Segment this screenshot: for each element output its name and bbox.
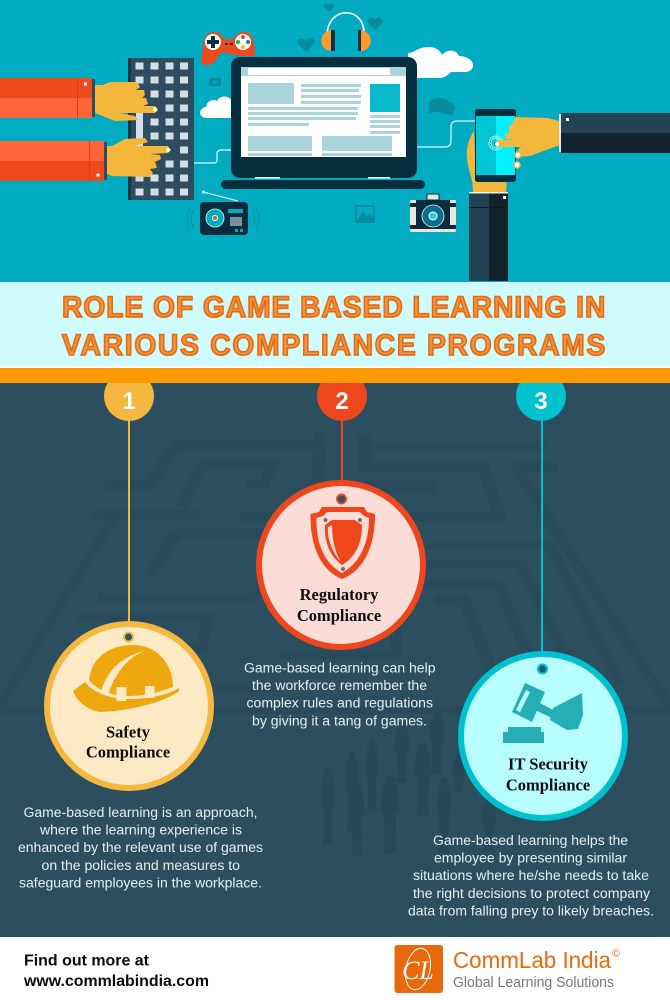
laptop screen — [241, 67, 406, 157]
item 1: safety compliance — [18, 383, 263, 890]
icon: video — [209, 78, 221, 86]
description: Game-based learning can help — [244, 660, 436, 676]
label: Compliance — [86, 742, 170, 762]
right cloud — [408, 47, 473, 78]
description: data from falling prey to likely breaches. — [408, 904, 654, 918]
description — [244, 660, 436, 728]
lower left arm and hand — [0, 138, 171, 181]
item 3: IT security compliance — [408, 383, 654, 918]
label: Compliance — [506, 776, 590, 794]
connector line — [541, 420, 543, 665]
icon: speech bubbles — [428, 98, 455, 115]
call to action text: www.commlabindia.com — [23, 973, 209, 990]
title — [62, 291, 605, 362]
connector line — [128, 420, 130, 625]
main dark panel — [0, 383, 670, 937]
icon: shield — [310, 507, 375, 579]
keyboard — [128, 58, 194, 200]
description: safeguard employees in the workplace. — [19, 876, 262, 890]
logo mark: CL — [402, 956, 434, 985]
item 2: regulatory compliance — [244, 383, 436, 728]
upper left arm and hand — [0, 78, 158, 121]
title: VARIOUS COMPLIANCE PROGRAMS — [62, 329, 605, 362]
smartphone — [475, 109, 516, 182]
label — [297, 585, 381, 625]
logo mark — [394, 945, 443, 993]
label: IT Security — [508, 754, 589, 774]
badge circle — [259, 483, 423, 647]
description: the workforce remember the — [252, 678, 427, 693]
number badge 1: 1 — [122, 388, 136, 415]
description: by giving it a tang of games. — [252, 714, 427, 728]
connector line — [341, 420, 343, 495]
label: Regulatory — [300, 585, 379, 604]
hero illustration panel — [0, 0, 670, 282]
call to action text: Find out more at — [24, 952, 150, 970]
CommLab India logo — [394, 945, 620, 993]
footer — [0, 937, 670, 1000]
label — [506, 754, 590, 794]
number badge 1 — [104, 383, 154, 421]
badge circle — [47, 624, 211, 788]
cables — [194, 121, 476, 163]
description — [18, 805, 263, 890]
number badge 2 — [317, 383, 367, 421]
icon: headphones — [321, 13, 371, 51]
icon: radio — [187, 190, 259, 235]
label: Safety — [106, 722, 151, 742]
description: Game-based learning helps the — [433, 833, 628, 848]
title band — [0, 282, 670, 368]
description: complex rules and regulations — [246, 696, 433, 710]
number badge 3 — [516, 383, 566, 421]
title: ROLE OF GAME BASED LEARNING IN — [62, 291, 605, 324]
badge circle — [461, 654, 625, 818]
description — [408, 833, 654, 918]
icon: picture — [356, 206, 374, 222]
call to action text — [23, 952, 209, 990]
description: the right decisions to protect company — [413, 886, 650, 901]
logo wordmark: CommLab India — [453, 947, 611, 973]
logo wordmark — [453, 947, 620, 991]
label: Compliance — [297, 606, 381, 625]
background maze — [0, 433, 670, 710]
icon: hearts — [297, 4, 382, 52]
description: situations where he/she needs to take — [413, 868, 649, 883]
logo wordmark: © — [612, 948, 620, 960]
logo wordmark: Global Learning Solutions — [453, 974, 614, 991]
right arm and pointing hand — [495, 113, 670, 168]
description: Game-based learning is an approach, — [24, 805, 258, 820]
icon: hard hat — [73, 645, 179, 712]
left cloud — [200, 97, 232, 118]
background crowd silhouettes — [321, 712, 497, 856]
orange divider — [0, 368, 670, 383]
number badge 3: 3 — [534, 388, 548, 415]
lower right arm and holding hand — [467, 131, 508, 281]
description: employee by presenting similar — [434, 850, 628, 866]
description: on the policies and measures to — [42, 858, 240, 873]
icon: camera — [410, 194, 456, 232]
icon: game controller — [201, 32, 255, 65]
icon: gavel — [503, 683, 583, 743]
description: where the learning experience is — [39, 822, 242, 838]
label — [86, 722, 170, 762]
laptop — [221, 57, 425, 189]
number badge 2: 2 — [335, 388, 349, 415]
description: enhanced by the relevant use of games — [18, 840, 263, 855]
